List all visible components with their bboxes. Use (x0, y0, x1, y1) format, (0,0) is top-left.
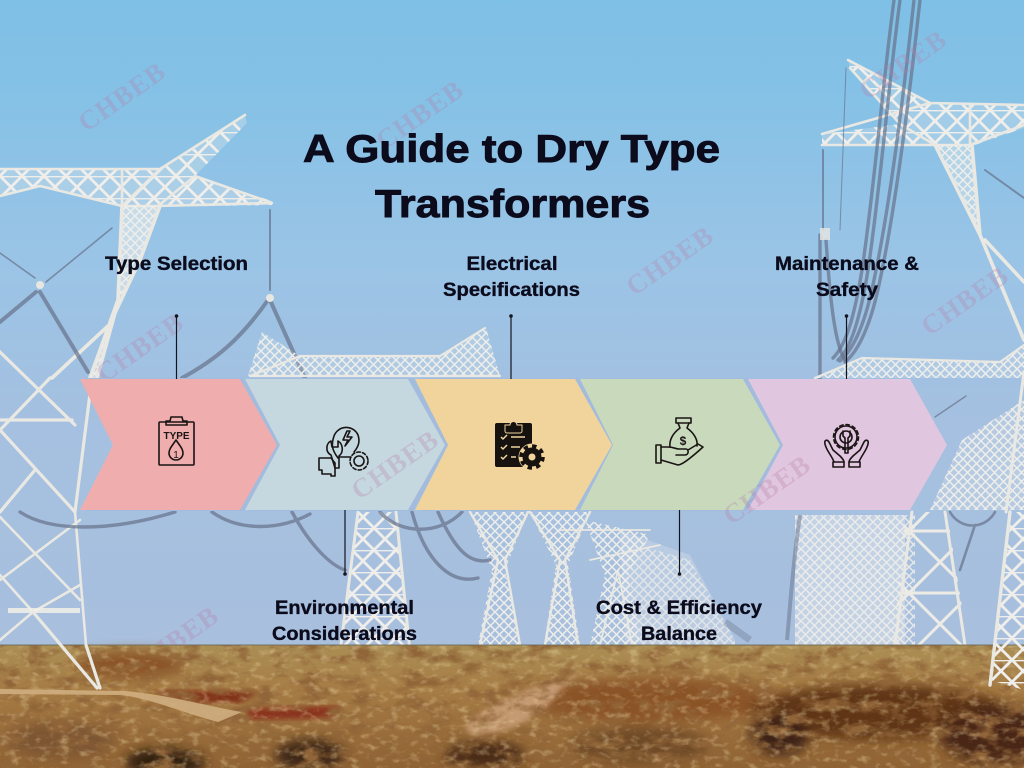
background: scrubland ground (0, 644, 1024, 768)
chevron 5: maintenance and safety (748, 379, 947, 510)
label: cost and efficiency balance (596, 598, 762, 645)
label: maintenance and safety: Safety (816, 280, 878, 301)
label: electrical specifications: Specifications (443, 280, 580, 301)
connector: cost and efficiency (678, 510, 681, 576)
connector: type selection (175, 314, 178, 379)
label: electrical specifications (443, 254, 580, 301)
watermarks over chevrons (345, 424, 816, 530)
chevron 1: type selection (80, 379, 277, 510)
label: cost and efficiency balance: Cost & Efficiency (596, 598, 762, 619)
chevron backing bands (85, 378, 785, 511)
watermarks (72, 24, 1014, 681)
icon: bulb, wrench, thumb and gear (319, 427, 368, 476)
connector: environmental considerations (343, 510, 347, 576)
background: distant pylon line (470, 512, 915, 645)
icon: type 1 clipboard: TYPE (164, 430, 190, 442)
label: cost and efficiency balance: Balance (641, 624, 717, 645)
watermarks: CHBEB (620, 220, 719, 301)
chevron 3: electrical specifications (415, 379, 612, 510)
icon: gear and wrench in hands (825, 424, 868, 467)
icon: money bag on hand (656, 418, 703, 465)
watermarks: CHBEB (125, 600, 224, 681)
background: right foreground pylons (893, 512, 995, 645)
title: A Guide to Dry Type (303, 128, 720, 171)
watermarks over chevrons: CHBEB (717, 449, 816, 530)
connector: electrical specifications (509, 314, 513, 379)
chevron process band (80, 378, 947, 511)
title: Transformers (375, 183, 650, 226)
chevron 4: cost and efficiency (580, 379, 780, 510)
label: electrical specifications: Electrical (466, 254, 558, 275)
label: environmental considerations: Considerations (272, 624, 417, 645)
label: maintenance and safety: Maintenance & (775, 254, 919, 275)
background: top-right pylon (815, 0, 1024, 512)
connector: maintenance and safety (845, 314, 848, 379)
icon: money bag on hand: $ (680, 434, 687, 448)
watermarks: CHBEB (72, 56, 171, 137)
watermarks: CHBEB (370, 74, 469, 155)
label: environmental considerations: Environmental (275, 598, 414, 619)
watermarks: CHBEB (90, 307, 189, 388)
watermarks: CHBEB (853, 24, 952, 105)
background: left pylon (0, 115, 345, 645)
watermarks: CHBEB (915, 260, 1014, 341)
icon: specification checklist with gear (495, 422, 546, 470)
chevron 2: environmental considerations (245, 379, 445, 510)
background: centre pylon (248, 328, 500, 652)
watermarks over chevrons: CHBEB (345, 424, 444, 505)
background: pylon legs over ground (33, 512, 1024, 690)
icon: type 1 clipboard (159, 417, 194, 465)
label: environmental considerations (272, 598, 417, 645)
icon: type 1 clipboard: 1 (173, 450, 179, 461)
label: type selection: Type Selection (105, 254, 248, 275)
label: maintenance and safety (775, 254, 919, 301)
title (303, 128, 720, 226)
